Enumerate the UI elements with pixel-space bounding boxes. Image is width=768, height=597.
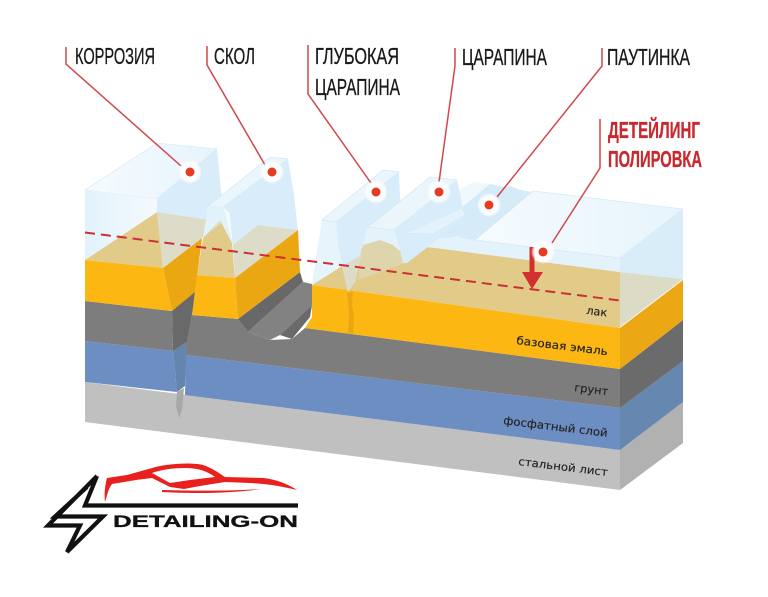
logo wordmark: DETAILING-ON [113,513,298,531]
arrow: polishing depth [522,247,543,289]
icon: car silhouette [105,464,297,502]
marker dots [178,160,555,264]
layer label: phosphate: фосфатный слой [503,414,608,440]
label: detailing polishing: ДЕТЕЙЛИНГ [608,116,700,143]
label: spider web: ПАУТИНКА [607,44,690,70]
logo: Detailing-On [48,464,298,552]
leader lines [66,45,602,243]
label: deep scratch [315,43,400,100]
label: detailing polishing [608,116,702,172]
label: deep scratch: ЦАРАПИНА [315,74,400,100]
layer: phosphate [85,341,683,450]
layer: primer [85,272,683,408]
label: chip: СКОЛ [214,43,255,69]
layer label: primer: грунт [574,381,610,398]
label: detailing polishing: ПОЛИРОВКА [608,146,702,172]
layer label: clear coat: лак [586,304,608,320]
dashed polishing limit line [85,232,620,300]
block: scratch and spider-web clear coat [358,177,683,280]
layer: clear coat tinted plane [85,212,683,328]
label: scratch: ЦАРАПИНА [462,44,547,70]
diagram: paint layer cross-section [85,143,683,490]
label: deep scratch: ГЛУБОКАЯ [315,43,399,69]
layer: base enamel [85,230,683,369]
layer: steel sheet [85,382,683,490]
block: corrosion clear coat [85,143,223,268]
layer label: steel sheet: стальной лист [518,455,609,479]
layer label: base enamel: базовая эмаль [516,334,609,358]
block: chip clear coat [203,157,298,278]
label: corrosion: КОРРОЗИЯ [75,43,155,69]
block: deep scratch clear coat [312,170,405,292]
icon: lightning bolt [48,476,298,552]
